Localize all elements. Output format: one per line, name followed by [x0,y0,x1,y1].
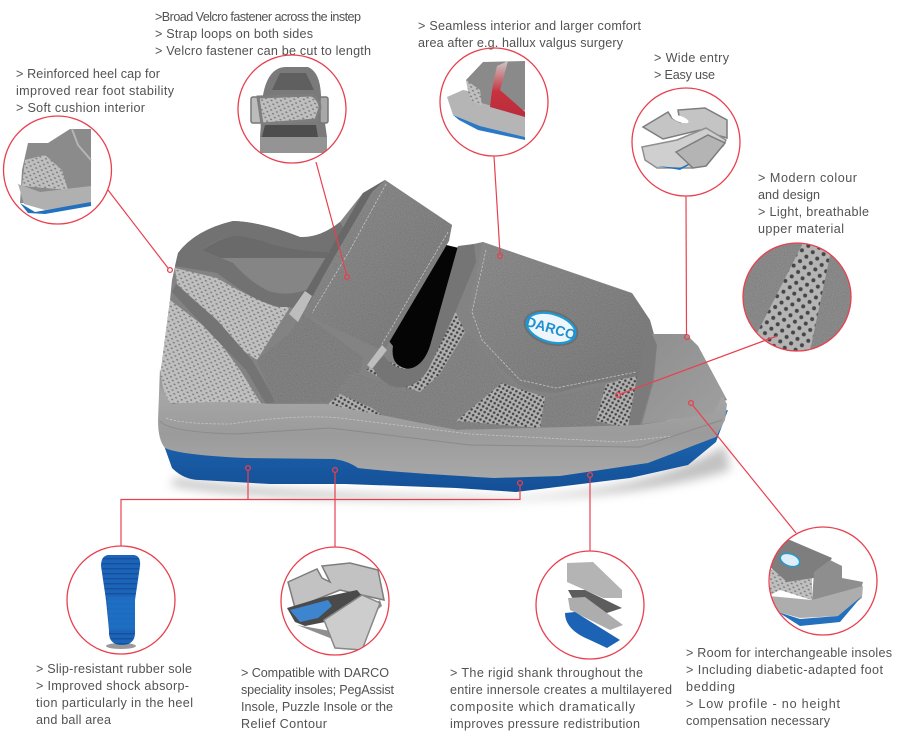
forefoot felt band [326,332,630,430]
exploded view detail photo [565,562,623,648]
insoles room text: > Room for interchangeable insoles [686,646,892,660]
heel cap text: improved rear foot stability [16,84,175,98]
shank text: composite which dramatically [450,700,636,714]
velcro text: > Velcro fastener can be cut to length [155,44,371,58]
insoles text: Insole, Puzzle Insole or the [241,700,393,714]
callout: heel cap [4,67,175,272]
velcro text: >Broad Velcro fastener across the instep [155,10,361,24]
insoles detail photo [287,563,384,650]
toe detail photo [768,540,863,626]
mesh text: > Light, breathable [758,205,869,219]
callout: rubber sole [36,466,522,727]
sole leaders [121,470,520,546]
seamless detail photo [447,61,525,140]
heel cap leader [108,190,168,268]
callout: speciality insoles [241,468,394,731]
mesh text: and design [758,188,820,202]
velcro text: > Strap loops on both sides [155,27,313,41]
DARCO logo badge: DARCO [524,313,578,343]
shank text: entire innersole creates a multilayered [450,683,672,697]
seamless text: > Seamless interior and larger comfort [418,19,642,33]
seamless ring [440,48,548,156]
ankle collar band [175,221,345,308]
mesh detail photo [743,243,851,351]
insoles room text: bedding [686,680,735,694]
rear velcro strap [289,180,452,369]
heel cap detail photo [18,129,91,214]
insoles text: > Compatible with DARCO [241,666,389,680]
DARCO logo badge [519,304,583,352]
wide entry text: > Wide entry [654,51,730,65]
callout: velcro fastener [155,10,371,279]
sole text: tion particularly in the heel [36,696,193,710]
mesh ring [743,243,851,351]
toe leader [692,405,796,533]
insoles text: Relief Contour [241,717,327,731]
sole detail photo [101,555,140,649]
mesh around opening [366,250,476,392]
outsole blue [162,410,728,492]
callout: interchangeable insoles [686,401,892,728]
sole text: > Improved shock absorp- [36,679,189,693]
heel cap text: > Reinforced heel cap for [16,67,160,81]
shank ring [536,551,644,659]
mesh text: upper material [758,222,844,236]
velcro leader [316,162,346,274]
sole ring [67,546,175,654]
heel upper mesh [175,268,290,360]
front velcro strap [468,242,646,393]
callout: wide entry [632,51,740,339]
seamless leader [494,156,500,254]
wide entry leader [685,196,688,334]
plastic strap loops [289,291,387,369]
ankle collar interior [202,227,347,293]
insoles room text: compensation necessary [686,714,831,728]
velcro detail photo [251,67,328,153]
lower midfoot mesh [328,394,388,420]
heel binding [172,284,276,404]
shank leader [589,478,591,551]
shank text: > The rigid shank throughout the [450,666,643,680]
footbed [642,334,726,424]
mesh text: > Modern colour [758,171,857,185]
ground shadow [170,445,730,501]
mesh leader [620,336,777,394]
insoles room text: > Low profile - no height [686,697,840,711]
toe ring [769,527,877,635]
insoles text: speciality insoles; PegAssist [241,683,394,697]
callout: rigid shank [450,473,672,731]
main shoe illustration [158,180,730,501]
toe gusset binding [628,293,657,428]
open shoe detail photo [642,108,727,170]
sole text: and ball area [36,713,111,727]
foot opening [380,240,459,369]
upper base silhouette [160,180,727,430]
callout: seamless interior [418,19,642,258]
insoles room text: > Including diabetic-adapted foot [686,663,884,677]
heel cap ring [4,116,112,224]
wide entry ring [632,88,740,196]
seamless text: area after e.g. hallux valgus surgery [418,36,624,50]
insoles leader [334,472,336,547]
heel mesh panel [160,300,262,405]
velcro ring [238,55,346,163]
midsole [158,368,727,478]
sole text: > Slip-resistant rubber sole [36,662,192,676]
wide entry text: > Easy use [654,68,715,82]
insoles ring [281,547,389,655]
callout: modern colour and mesh [616,171,869,397]
shank text: improves pressure redistribution [450,717,640,731]
heel cap text: > Soft cushion interior [16,101,145,115]
midfoot felt panel [257,313,363,403]
